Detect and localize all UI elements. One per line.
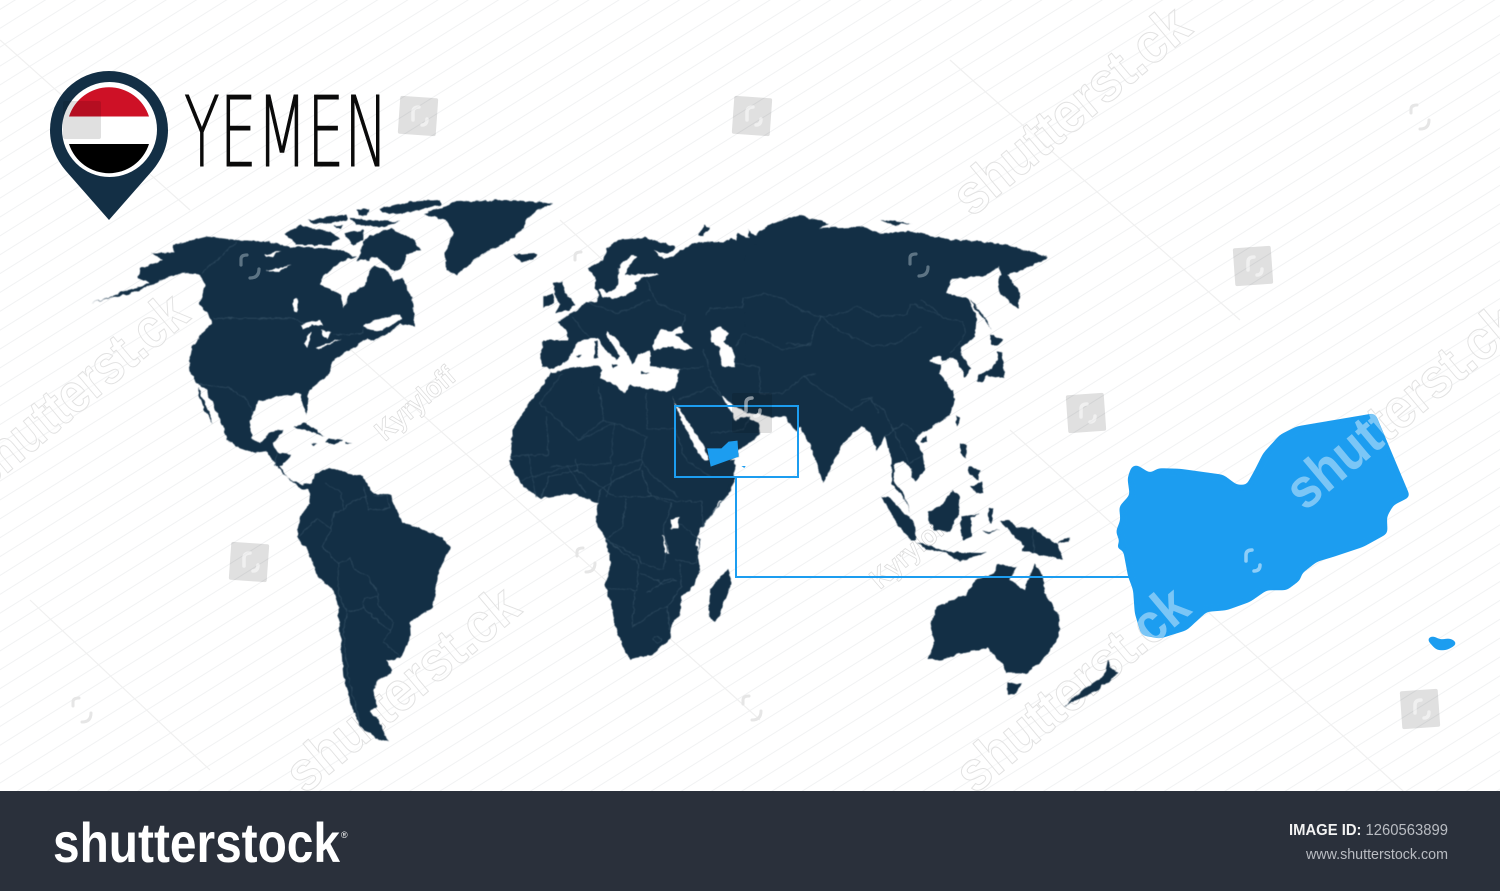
- world map: [92, 200, 1118, 742]
- footer bar: [0, 791, 1500, 891]
- Taiwan: [956, 415, 960, 427]
- Baja California: [198, 387, 213, 423]
- Great Lakes and inland water: [264, 251, 402, 349]
- title: YEMEN: [184, 76, 388, 189]
- registered mark: ®: [341, 830, 348, 840]
- New Guinea: [1000, 520, 1070, 560]
- image id: IMAGE ID: 1260563899: [1289, 822, 1448, 839]
- Yemen highlighted on world map: [707, 441, 746, 468]
- Hainan: [922, 437, 927, 443]
- Java and Lesser Sunda: [917, 543, 987, 562]
- Sulawesi: [960, 513, 980, 540]
- British Isles: [553, 282, 575, 313]
- Red Sea: [671, 395, 711, 472]
- watermark text: shutterst.ck: [272, 572, 532, 804]
- North America: [92, 200, 553, 490]
- flag map pin: [50, 71, 168, 220]
- Sakhalin: [970, 298, 992, 330]
- text: Kyryloff: [369, 360, 462, 447]
- Caribbean islands: [293, 423, 325, 437]
- Tasmania: [1007, 683, 1022, 695]
- Novaya Zemlya: [698, 225, 710, 235]
- Caspian Sea: [710, 327, 735, 367]
- watermark over enlarged Yemen: shutterst.ck: [942, 572, 1202, 804]
- Asia interior and northern Africa: [511, 215, 1046, 500]
- watermark over enlarged Yemen: [1138, 414, 1386, 638]
- Moluccas: [988, 508, 993, 523]
- New Zealand: [1063, 660, 1118, 707]
- Madagascar: [708, 568, 731, 622]
- Socotra island: [1426, 636, 1458, 650]
- leader line to enlarged Yemen: [736, 477, 1130, 577]
- watermark swirl icons: [244, 107, 1429, 718]
- Black Sea: [653, 327, 693, 350]
- East Asia coast: [920, 250, 1047, 400]
- Australia: [929, 563, 1059, 673]
- borders: Middle East, Central Asia and Africa: [511, 280, 939, 497]
- Arctic Russia islands: [880, 220, 912, 225]
- southern Africa, Madagascar and Oceania: [510, 460, 1118, 707]
- shutterstock logo: shutterstock: [53, 811, 341, 874]
- borders: USA Canada Mexico: [198, 242, 363, 465]
- watermark squares: [63, 96, 1440, 729]
- Philippines: [960, 443, 967, 458]
- Japan: [990, 335, 1003, 345]
- Sumatra: [882, 496, 917, 540]
- Borneo: [928, 490, 960, 532]
- Greenland: [423, 200, 553, 275]
- location box around Yemen: [675, 406, 798, 477]
- Mediterranean islands: [594, 342, 598, 358]
- Mediterranean Sea: [550, 332, 680, 393]
- Lake Victoria and Lake Tanganyika: [671, 517, 680, 528]
- Baltic Sea: [598, 255, 658, 299]
- Southeast Asia: [860, 390, 1070, 562]
- website: www.shutterstock.com: [1305, 846, 1448, 863]
- Yemen flag: [69, 87, 149, 173]
- South America: [297, 468, 451, 742]
- Iceland: [514, 253, 537, 262]
- enlarged Yemen: [1116, 413, 1458, 650]
- text: Kyryloff: [864, 508, 957, 595]
- watermark text: shutterst.ck: [942, 572, 1202, 804]
- Arctic islands: [285, 225, 340, 245]
- Europe: [540, 225, 745, 395]
